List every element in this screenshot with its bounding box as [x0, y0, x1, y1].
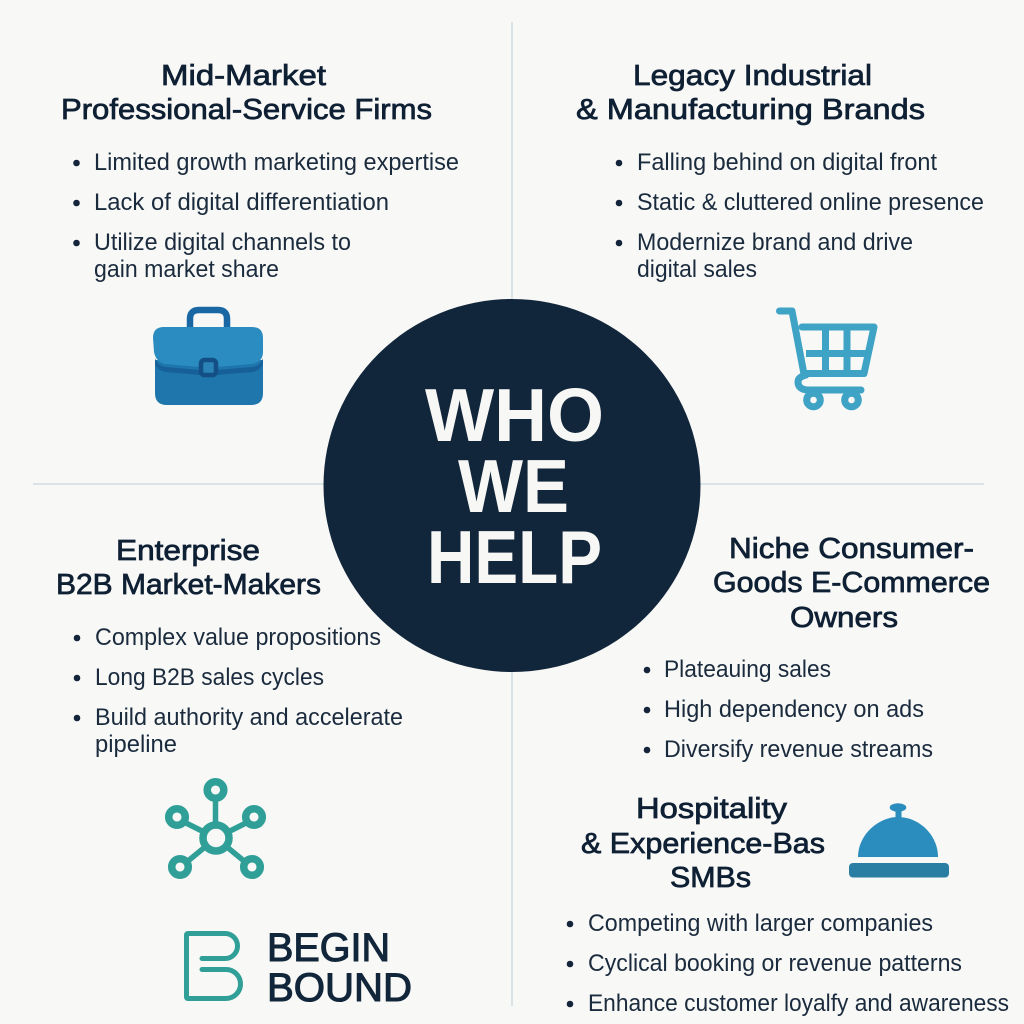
- center circle: who we help: WHO: [425, 373, 604, 457]
- panel: hospitality & experience-based smbs: [567, 793, 1009, 1017]
- bullet list: hospitality: Cyclical booking or revenue patterns: [588, 950, 962, 977]
- bullet list: enterprise b2b: [74, 624, 403, 758]
- bullet list: hospitality: [567, 910, 1009, 1017]
- logo wordmark: [267, 926, 412, 1010]
- icon: network nodes: [169, 782, 262, 875]
- bullet list: hospitality: Enhance customer loyalfy and awareness: [588, 990, 1009, 1017]
- bullet list: enterprise b2b: Complex value propositions: [95, 624, 381, 651]
- heading: hospitality: SMBs: [670, 862, 751, 894]
- heading: niche consumer: Niche Consumer-: [729, 533, 974, 565]
- heading: hospitality: & Experience-Bas: [581, 828, 825, 860]
- heading: niche consumer: Owners: [790, 602, 898, 634]
- heading: mid-market: [61, 60, 432, 126]
- heading: enterprise b2b: [56, 535, 321, 601]
- bullet list: niche consumer: Diversify revenue streams: [664, 736, 933, 763]
- icon: briefcase: [153, 310, 263, 405]
- heading: legacy industrial: & Manufacturing Brands: [576, 94, 925, 126]
- panel: mid-market professional-service firms: [61, 60, 459, 405]
- panel: niche consumer-goods e-commerce owners: [644, 533, 990, 763]
- bullet list: mid-market: [73, 149, 459, 283]
- heading: legacy industrial: Legacy Industrial: [633, 60, 872, 92]
- bullet list: hospitality: Competing with larger companies: [588, 910, 933, 937]
- bullet list: mid-market: Utilize digital channels to: [94, 229, 351, 256]
- center circle: who we help: HELP: [427, 515, 602, 599]
- logo wordmark: BOUND: [267, 966, 412, 1010]
- bullet list: niche consumer: High dependency on ads: [664, 696, 924, 723]
- icon: shopping cart: [780, 311, 874, 407]
- heading: niche consumer: Goods E-Commerce: [713, 567, 990, 599]
- bullet list: legacy industrial: Falling behind on digital front: [637, 149, 937, 176]
- heading: enterprise b2b: B2B Market-Makers: [56, 569, 321, 601]
- panel: legacy industrial & manufacturing brands: [576, 60, 984, 407]
- bullet list: niche consumer: [644, 656, 933, 763]
- heading: mid-market: Professional-Service Firms: [61, 94, 432, 126]
- heading: hospitality: Hospitality: [636, 793, 788, 825]
- bullet list: legacy industrial: Modernize brand and drive: [637, 229, 913, 256]
- heading: enterprise b2b: Enterprise: [116, 535, 260, 567]
- center circle: who we help: WE: [458, 444, 569, 528]
- bullet list: legacy industrial: digital sales: [637, 256, 757, 283]
- bullet list: enterprise b2b: Build authority and accelerate: [95, 704, 403, 731]
- center circle: who we help: [324, 299, 700, 672]
- bullet list: mid-market: gain market share: [94, 256, 279, 283]
- heading: legacy industrial: [576, 60, 925, 126]
- bullet list: enterprise b2b: Long B2B sales cycles: [95, 664, 324, 691]
- bullet list: mid-market: Limited growth marketing expertise: [94, 149, 459, 176]
- heading: hospitality: [581, 793, 825, 894]
- bullet list: legacy industrial: Static & cluttered online presence: [637, 189, 984, 216]
- logo mark: [186, 934, 240, 998]
- bullet list: legacy industrial: [616, 149, 984, 283]
- icon: service bell: [849, 803, 949, 878]
- logo: begin bound: [186, 926, 412, 1010]
- logo wordmark: BEGIN: [267, 926, 390, 970]
- heading: mid-market: Mid-Market: [161, 60, 326, 92]
- panel: enterprise b2b market-makers: [56, 535, 403, 875]
- heading: niche consumer: [713, 533, 990, 634]
- bullet list: mid-market: Lack of digital differentiation: [94, 189, 389, 216]
- bullet list: niche consumer: Plateauing sales: [664, 656, 831, 683]
- bullet list: enterprise b2b: pipeline: [95, 731, 177, 758]
